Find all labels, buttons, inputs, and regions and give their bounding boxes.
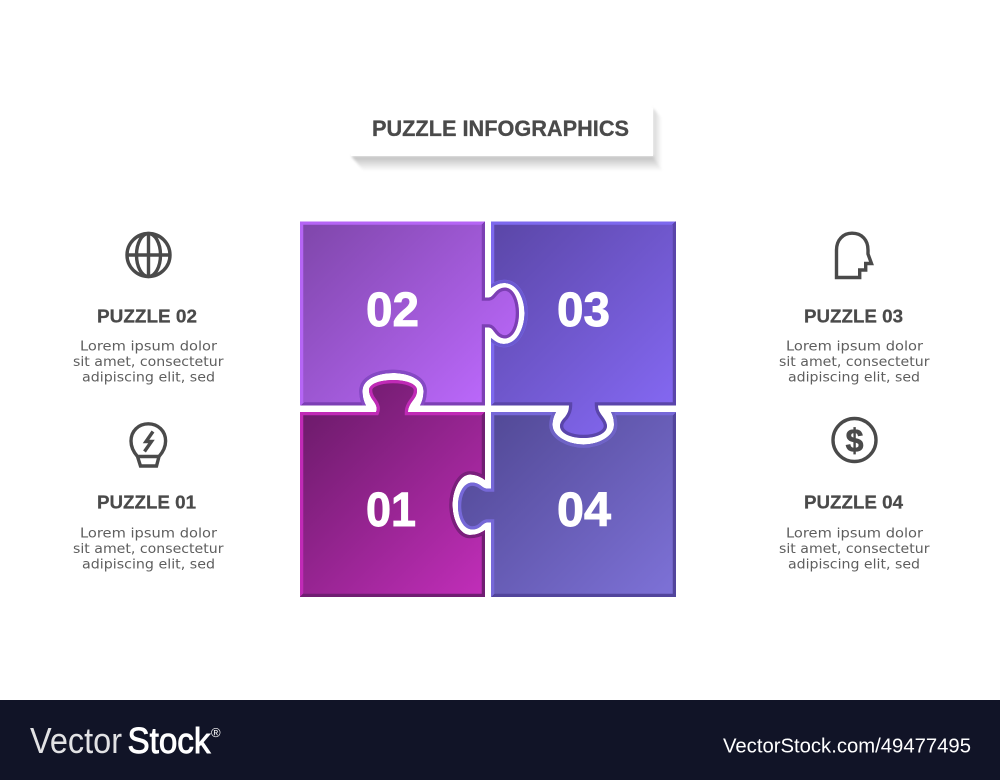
image id: VectorStock.com/49477495 [723,736,971,758]
panel: puzzle 04 [779,418,930,572]
text block [779,527,930,572]
logo: Stock [128,720,211,761]
panel: puzzle 03 [779,233,930,385]
icon: light bulb [131,424,166,466]
puzzle grid [300,222,676,597]
title: PUZZLE INFOGRAPHICS [372,116,629,141]
text block: sit amet, consectetur [779,542,930,557]
text block: adipiscing elit, sed [82,370,215,385]
puzzle piece 04: 04 [557,484,611,537]
icon: dollar coin: $ [846,422,864,458]
heading: PUZZLE 04 [804,491,904,512]
text block: adipiscing elit, sed [82,557,215,572]
puzzle piece 01: 01 [366,484,416,537]
icon: head profile [836,233,872,278]
text block: sit amet, consectetur [73,542,224,557]
panel: puzzle 01 [73,424,224,572]
logo: ® [211,725,221,740]
icon: globe [127,234,170,276]
title banner [351,108,663,171]
text block: adipiscing elit, sed [788,557,920,572]
text block: adipiscing elit, sed [788,370,920,385]
text block [779,340,930,385]
puzzle piece 02 [300,222,519,406]
text block: Lorem ipsum dolor [80,340,218,355]
text block [73,340,224,385]
puzzle piece 01 [300,380,485,597]
puzzle piece 03: 03 [557,284,610,337]
banner shadow [351,108,663,171]
puzzle piece 04 [458,412,676,597]
text block: Lorem ipsum dolor [786,340,924,355]
panel: puzzle 02 [73,234,224,385]
heading: PUZZLE 03 [804,305,903,326]
text block: sit amet, consectetur [779,355,930,370]
logo: Vector [30,720,122,761]
text block: Lorem ipsum dolor [80,527,218,542]
logo [30,720,221,761]
icon: dollar coin [833,418,876,462]
heading: PUZZLE 01 [97,491,196,512]
text block: Lorem ipsum dolor [786,527,924,542]
heading: PUZZLE 02 [97,305,197,326]
puzzle piece 02: 02 [366,284,419,337]
banner panel [351,108,653,156]
footer bar [0,700,1000,780]
text block [73,527,224,572]
puzzle piece 03 [491,222,676,438]
text block: sit amet, consectetur [73,355,224,370]
